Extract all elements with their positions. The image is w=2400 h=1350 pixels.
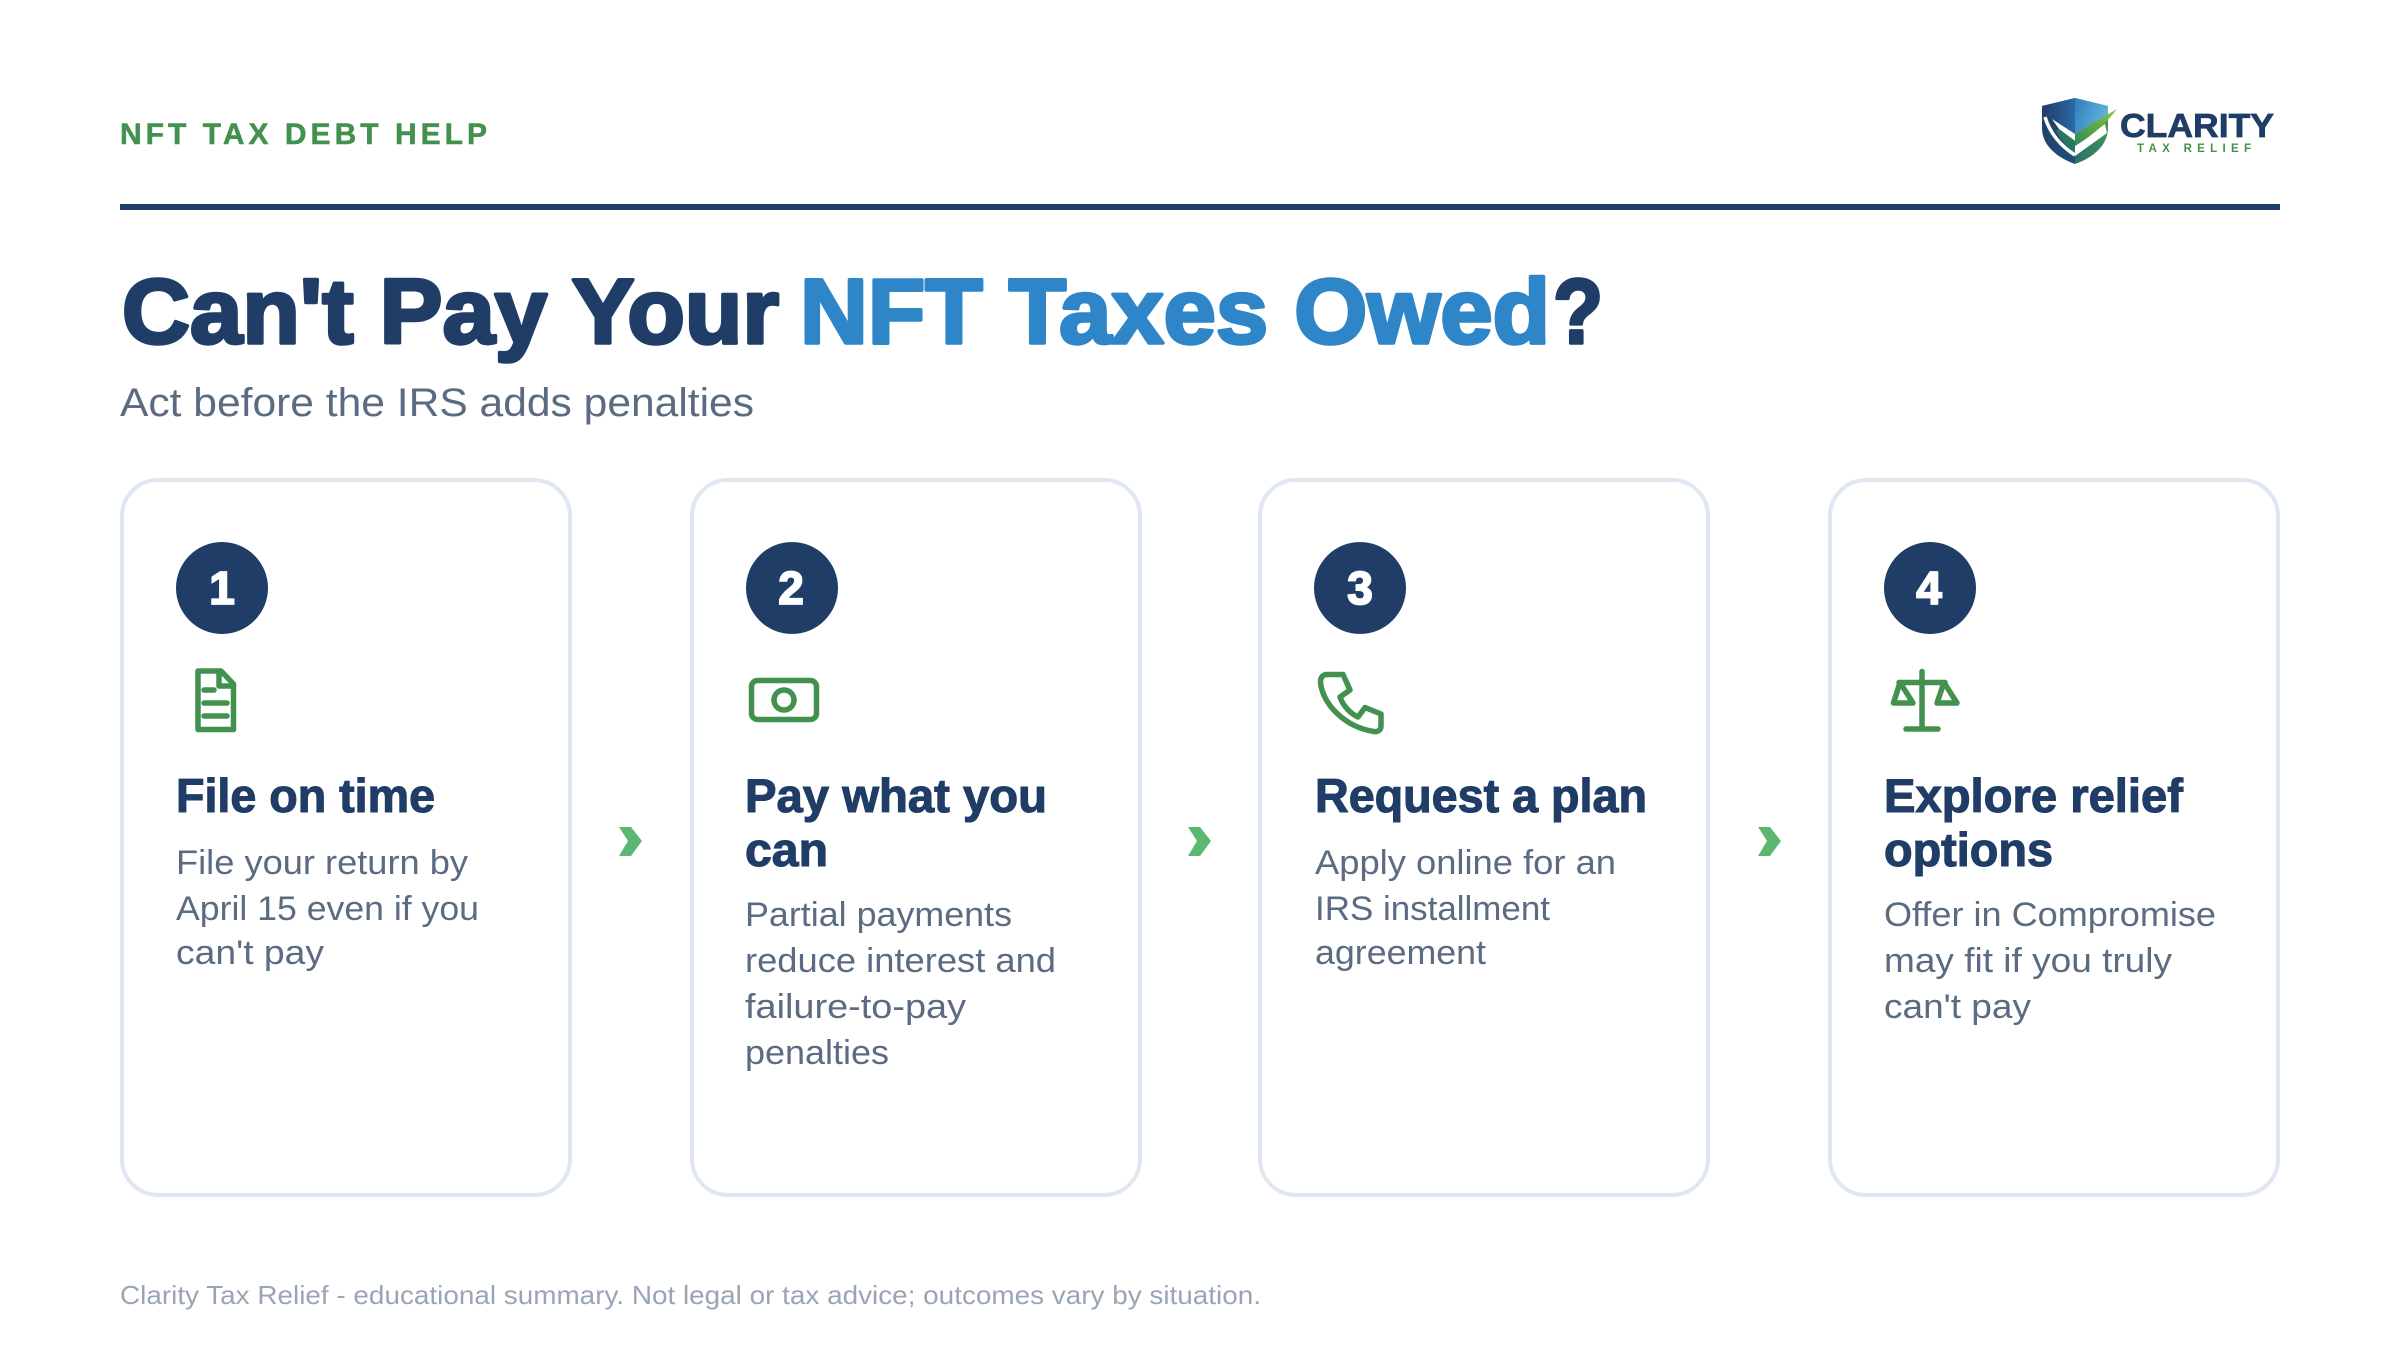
- number badge 3: [1314, 542, 1406, 634]
- number badge 2: [746, 542, 838, 634]
- step description: Offer in Compromise: [1884, 896, 2216, 934]
- number badge 3: 3: [1347, 562, 1373, 614]
- logo: Clarity Tax Relief: [2042, 98, 2274, 164]
- step title: Pay what you: [745, 769, 1047, 822]
- icon: scales: [1894, 672, 1957, 729]
- step description: [1315, 844, 1616, 972]
- title: Can't Pay Your: [122, 261, 779, 363]
- step description: File your return by: [176, 844, 468, 882]
- step title: File on time: [176, 769, 435, 822]
- logo: Clarity Tax Relief: CLARITY: [2120, 107, 2274, 144]
- step description: can't pay: [176, 934, 324, 972]
- step title: options: [1884, 823, 2053, 876]
- arrow 2: [1188, 827, 1211, 856]
- number badge 1: [176, 542, 268, 634]
- step description: April 15 even if you: [176, 890, 479, 928]
- step description: can't pay: [1884, 988, 2031, 1026]
- logo: Clarity Tax Relief: TAX RELIEF: [2137, 143, 2251, 155]
- step description: [745, 896, 1056, 1072]
- eyebrow heading: NFT TAX DEBT HELP: [120, 118, 487, 151]
- step description: failure-to-pay: [745, 988, 966, 1026]
- title: ?: [1553, 261, 1603, 363]
- step description: [176, 844, 479, 972]
- step description: agreement: [1315, 934, 1487, 972]
- panel: step 2: [692, 480, 1140, 1195]
- panel: step 4: [1830, 480, 2278, 1195]
- step description: IRS installment: [1315, 890, 1551, 928]
- number badge 4: 4: [1916, 562, 1942, 614]
- footer disclaimer: Clarity Tax Relief - educational summary. Not legal or tax advice; outcomes vary by situation.: [120, 1280, 1261, 1310]
- arrow 1: [619, 827, 642, 856]
- step description: [1884, 896, 2216, 1026]
- number badge 4: [1884, 542, 1976, 634]
- number badge 2: 2: [778, 562, 804, 614]
- step title: Request a plan: [1315, 769, 1647, 822]
- arrow 3: [1758, 827, 1781, 856]
- step title: [1884, 769, 2183, 876]
- number badge 1: 1: [209, 562, 235, 614]
- icon: phone: [1320, 674, 1381, 732]
- icon: banknote: [752, 680, 816, 720]
- panel: step 1: [122, 480, 570, 1195]
- step description: penalties: [745, 1034, 889, 1072]
- panel: step 3: [1260, 480, 1708, 1195]
- step description: Partial payments: [745, 896, 1012, 934]
- step title: [745, 769, 1047, 876]
- step title: can: [745, 823, 828, 876]
- title: NFT Taxes Owed: [800, 261, 1550, 363]
- header rule: [120, 204, 2280, 210]
- step title: Explore relief: [1884, 769, 2183, 822]
- title: [122, 261, 1603, 363]
- step description: may fit if you truly: [1884, 942, 2172, 980]
- step description: reduce interest and: [745, 942, 1056, 980]
- step description: Apply online for an: [1315, 844, 1616, 882]
- subtitle: Act before the IRS adds penalties: [120, 381, 754, 425]
- icon: document: [198, 671, 234, 730]
